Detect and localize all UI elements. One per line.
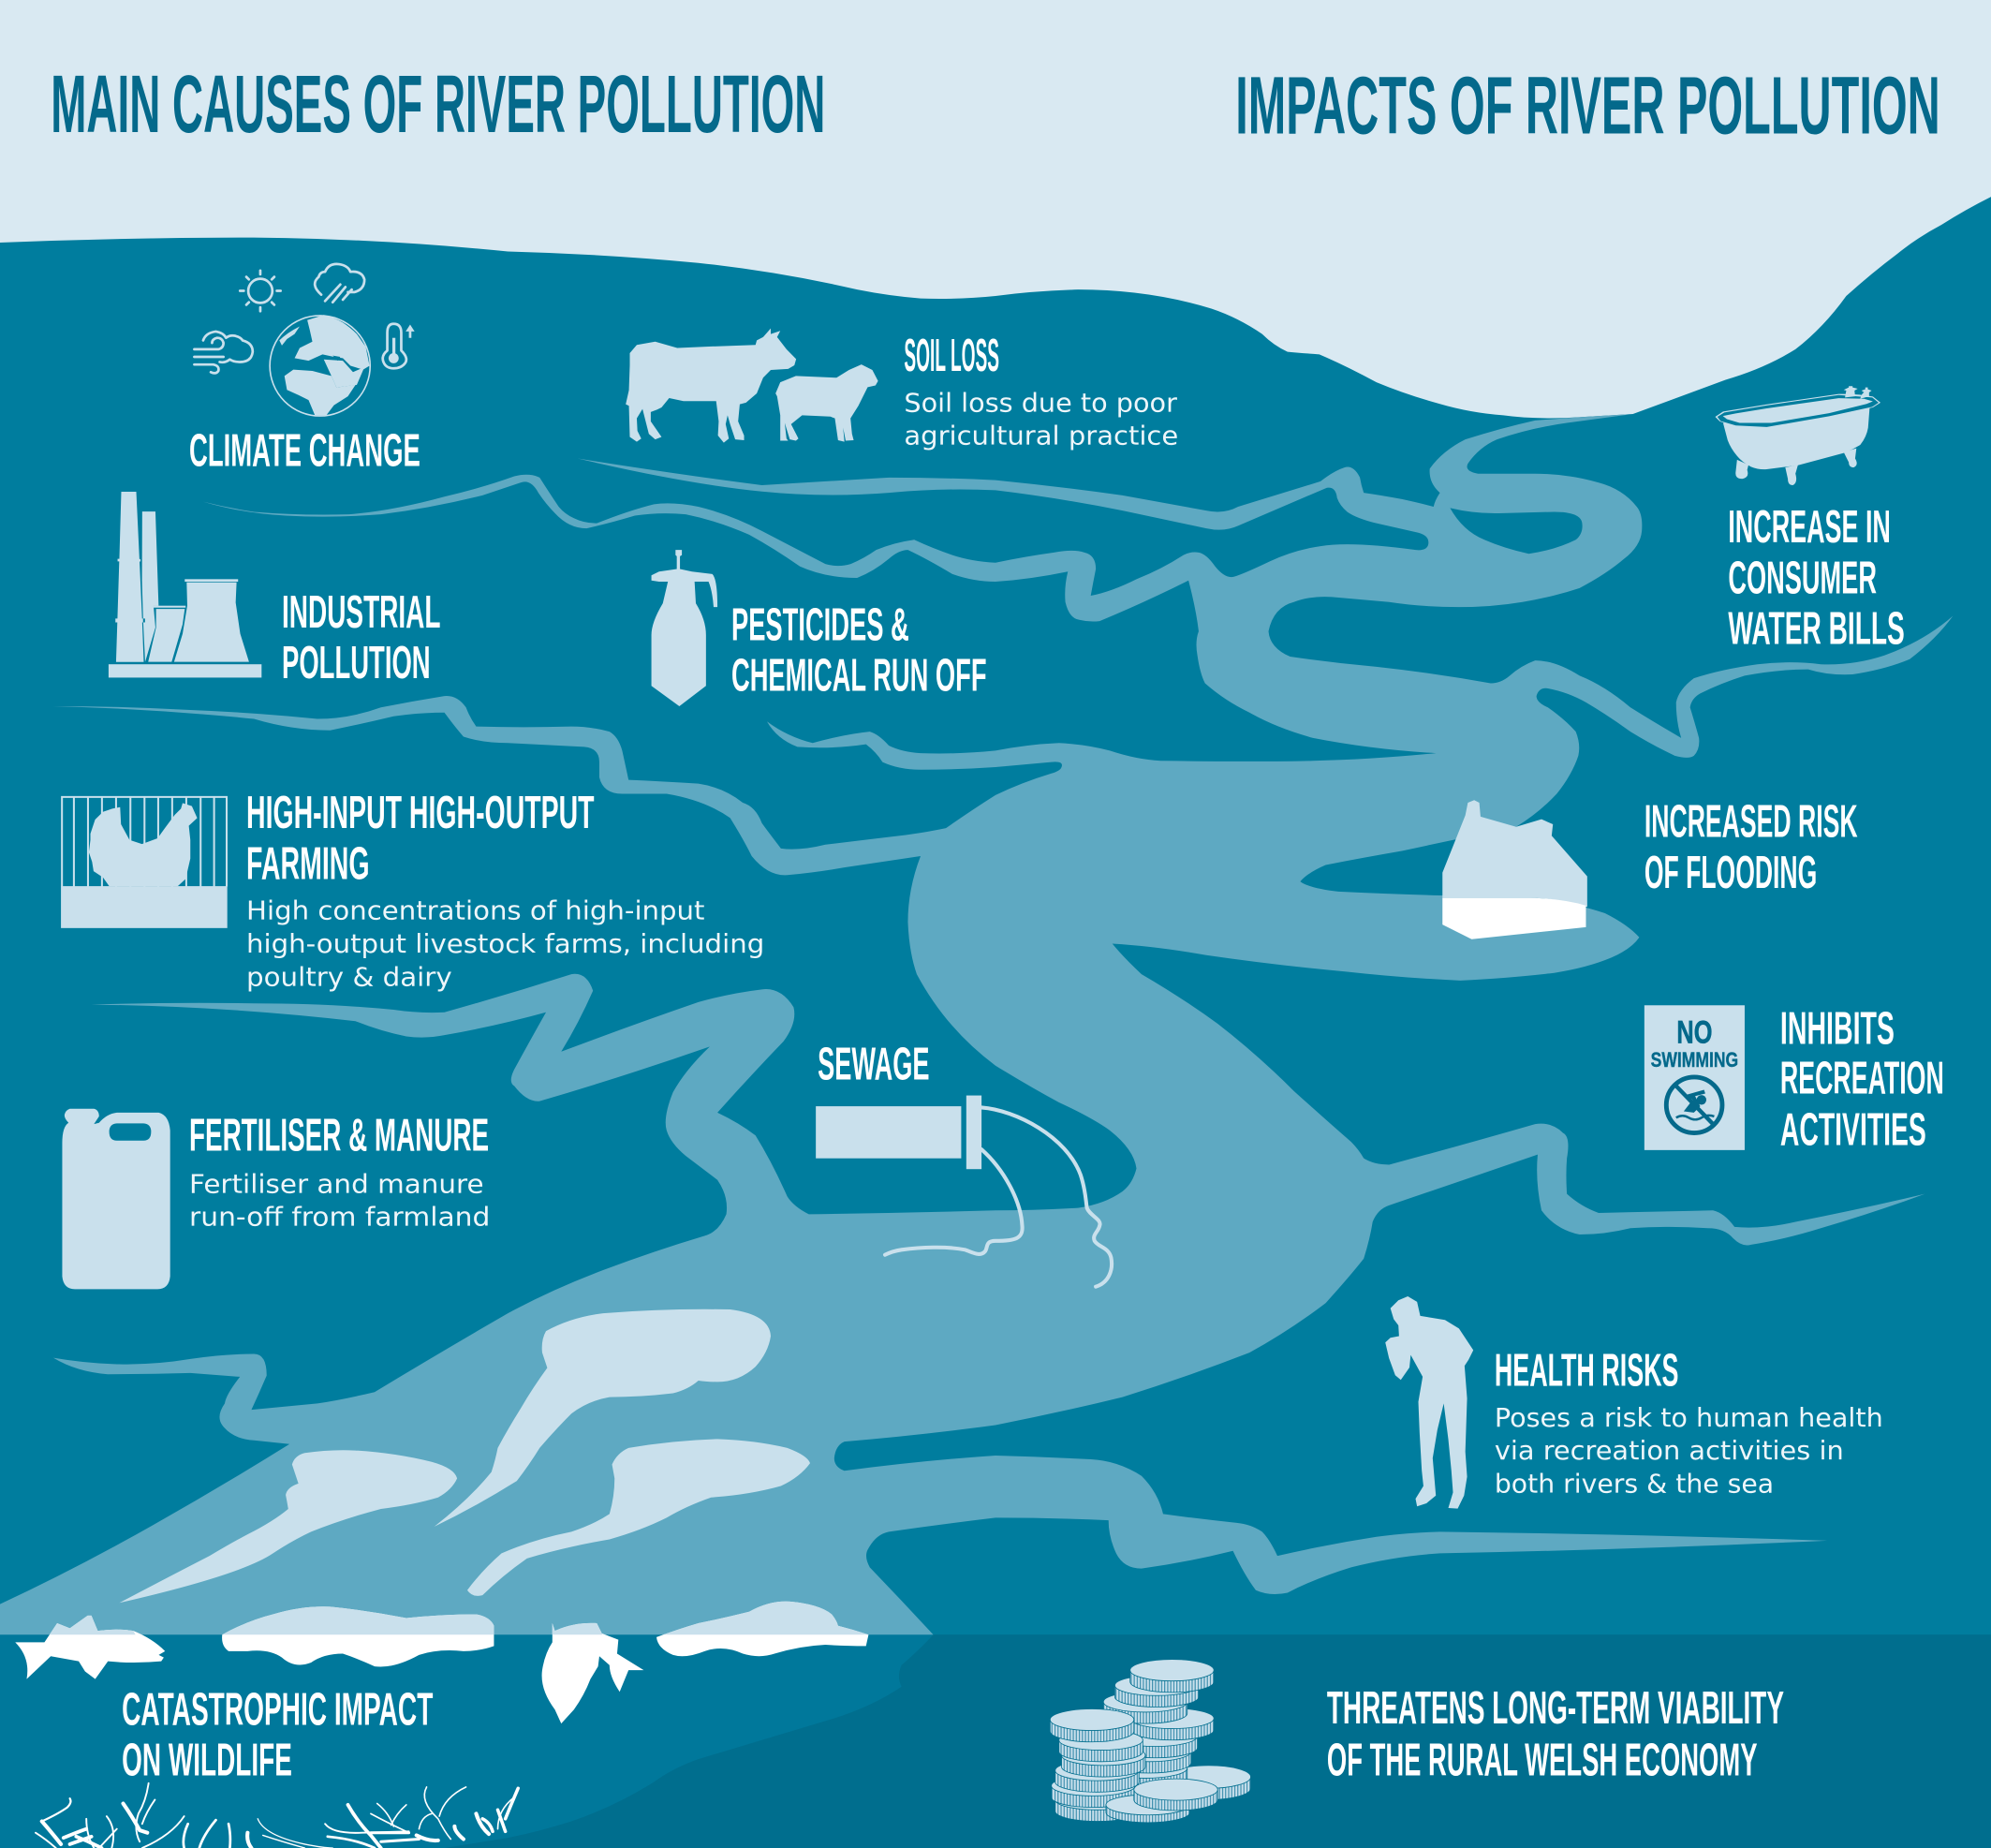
health risks item — [1385, 1296, 1883, 1509]
icon: sick person — [1385, 1296, 1473, 1509]
icon: wind cloud — [194, 332, 253, 373]
high-input farming item — [61, 788, 764, 992]
icon: flooded house submerged — [1442, 898, 1585, 939]
wildlife impact label: CATASTROPHIC IMPACT — [122, 1684, 433, 1735]
text: farming description: high-output livestock farms, including — [246, 928, 764, 959]
climate change item — [189, 264, 420, 477]
icon: no swimming sign — [1644, 1005, 1745, 1150]
icon: globe — [270, 315, 370, 416]
text: soil loss description: Soil loss due to poor — [904, 387, 1177, 418]
text: fertiliser description: run-off from farmland — [189, 1202, 490, 1233]
icon: spray bottle — [652, 550, 717, 706]
sludge blob 3 — [467, 1439, 810, 1596]
label: flooding: OF FLOODING — [1644, 848, 1817, 898]
icon: flooded house roof and walls — [1442, 800, 1587, 907]
icon: no swimming sign: NO — [1676, 1014, 1712, 1050]
text: health description: Poses a risk to human health — [1495, 1402, 1883, 1433]
soil loss item: SOIL LOSS — [904, 331, 999, 381]
text: soil loss description: agricultural practice — [904, 421, 1178, 451]
estuary shading on the band — [0, 1634, 934, 1848]
label: sewage: SEWAGE — [818, 1040, 929, 1090]
soil loss item — [626, 329, 1178, 451]
fish 2 — [542, 1623, 643, 1723]
icon: canister — [62, 1109, 170, 1289]
sludge blob 1 — [435, 1309, 771, 1527]
icon: sewage stream right — [981, 1107, 1112, 1287]
bottom band — [0, 1634, 1991, 1848]
icon: bath — [1716, 386, 1880, 485]
text: farming description: High concentrations of high-input — [246, 895, 705, 926]
fertiliser item — [62, 1109, 490, 1289]
fish 2 above waterline — [553, 1622, 603, 1635]
label: industrial pollution: POLLUTION — [282, 638, 431, 688]
river system — [0, 414, 1953, 1634]
icon: sheep — [775, 364, 878, 442]
fish 1 above waterline — [49, 1615, 135, 1635]
label: high-input high-output farming: HIGH-INPUT HIGH-OUTPUT — [246, 788, 595, 838]
sludge blob 4 above waterline — [222, 1606, 494, 1635]
wildlife impact label: ON WILDLIFE — [122, 1736, 292, 1786]
icon: thermometer — [383, 324, 415, 368]
water bills item — [1716, 386, 1905, 654]
pesticides item — [652, 550, 987, 706]
icon: cow — [626, 329, 796, 443]
icon: rain cloud — [315, 264, 364, 303]
heading: main causes: MAIN CAUSES OF RIVER POLLUTION — [51, 59, 825, 150]
icon: caged hen — [61, 796, 228, 928]
label: pesticides: PESTICIDES & — [731, 599, 909, 650]
grass — [36, 1783, 518, 1848]
label: industrial pollution: INDUSTRIAL — [282, 587, 440, 638]
economy item — [1050, 1660, 1784, 1823]
sky — [0, 0, 1991, 418]
sludge blob 2 — [119, 1450, 457, 1603]
label: health risks: HEALTH RISKS — [1495, 1345, 1678, 1396]
label: water bills: CONSUMER — [1728, 553, 1877, 603]
label: recreation: INHIBITS — [1780, 1004, 1895, 1055]
river oxbow island — [1450, 508, 1583, 554]
sewage item — [816, 1040, 1112, 1287]
icon: no swimming sign: SWIMMING — [1651, 1048, 1738, 1072]
icon: factory — [109, 492, 261, 677]
label: pesticides: CHEMICAL RUN OFF — [731, 651, 987, 702]
text: health description: via recreation activities in — [1495, 1435, 1844, 1466]
icon: pipe — [816, 1096, 981, 1169]
sludge blob 5 white part — [656, 1602, 868, 1656]
icon: sewage stream left — [885, 1149, 1023, 1255]
sludge blob 5 above waterline — [663, 1602, 869, 1635]
text: fertiliser description: Fertiliser and manure — [189, 1168, 484, 1199]
sludge blob 4 white part — [222, 1606, 494, 1667]
fish 1 — [15, 1616, 165, 1679]
text: farming description: poultry & dairy — [246, 961, 452, 992]
label: climate change: CLIMATE CHANGE — [189, 426, 420, 477]
industrial pollution item — [109, 492, 440, 688]
label: fertiliser and manure: FERTILISER & MANURE — [189, 1111, 489, 1161]
recreation item — [1644, 1004, 1944, 1155]
icon: sun — [240, 271, 281, 311]
text: health description: both rivers & the sea — [1495, 1468, 1774, 1499]
label: high-input high-output farming: FARMING — [246, 838, 370, 889]
icon: stack of coins — [1050, 1660, 1251, 1823]
flooding item — [1442, 797, 1858, 939]
